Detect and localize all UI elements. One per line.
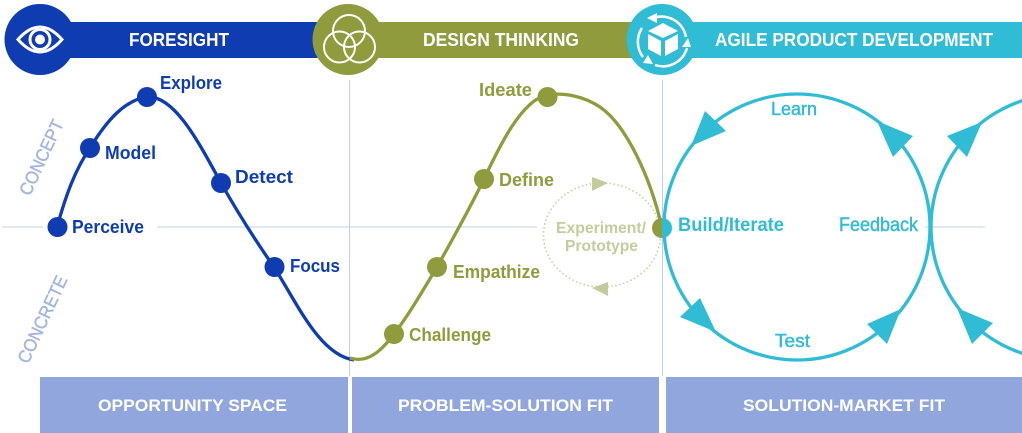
point: ideate: Ideate (479, 80, 532, 100)
header bands (4, 4, 1022, 75)
point: focus: Focus (290, 256, 340, 276)
point: empathize (427, 257, 540, 282)
icon: overlapping circles (324, 15, 375, 62)
label: experiment / prototype (556, 220, 647, 255)
point: empathize: Empathize (453, 262, 540, 282)
point: define: Define (499, 170, 554, 190)
arrow: second loop bottom (957, 308, 993, 344)
header: foresight (4, 4, 330, 75)
arrow: test left (680, 298, 716, 332)
experiment and prototype loop (544, 177, 660, 296)
point: challenge: Challenge (409, 325, 491, 345)
arrow: test right (867, 309, 901, 344)
point: explore (137, 73, 222, 107)
axis label: concept: CONCEPT (15, 117, 68, 198)
point: model: Model (105, 143, 156, 163)
heading: agile product development: AGILE PRODUCT DEVELOPMENT (715, 30, 993, 50)
label: experiment / prototype: Experiment/ (556, 220, 647, 237)
design thinking curve (350, 80, 662, 359)
heading: foresight: FORESIGHT (129, 30, 229, 50)
arrow: experiment loop bottom (592, 282, 608, 296)
build/iterate node (652, 215, 784, 238)
label: test: Test (775, 331, 810, 351)
axis label: concrete: CONCRETE (14, 273, 71, 366)
header: design thinking (312, 4, 648, 75)
point: ideate (479, 80, 558, 107)
band: problem-solution fit (352, 377, 659, 433)
icon: eye (18, 27, 62, 52)
header: agile product development (626, 4, 1022, 75)
heading: design thinking: DESIGN THINKING (423, 30, 579, 50)
band: opportunity space: OPPORTUNITY SPACE (98, 396, 287, 415)
point: focus (264, 256, 340, 277)
label: experiment / prototype: Prototype (565, 238, 638, 255)
point: detect: Detect (235, 167, 293, 187)
point: explore: Explore (160, 73, 222, 93)
arrow: learn right (877, 121, 913, 157)
point: model (80, 138, 156, 163)
point: perceive: Perceive (72, 217, 144, 237)
icon: cube with cycle arrows (638, 13, 691, 66)
arrow: second loop top (947, 122, 982, 157)
band: opportunity space (40, 377, 348, 433)
footer bands (40, 377, 1022, 433)
label: build/iterate: Build/Iterate (678, 215, 784, 236)
point: define (474, 169, 554, 190)
foresight curve (48, 73, 354, 360)
label: learn: Learn (771, 99, 817, 119)
arrow: learn left (691, 111, 726, 146)
band: solution-market fit: SOLUTION-MARKET FIT (743, 396, 946, 415)
label: feedback: Feedback (839, 215, 918, 236)
point: detect (211, 167, 293, 193)
arrow: experiment loop top (592, 177, 608, 191)
band: solution-market fit (666, 377, 1022, 433)
band: problem-solution fit: PROBLEM-SOLUTION FIT (398, 396, 614, 415)
agile loops (664, 94, 1022, 360)
